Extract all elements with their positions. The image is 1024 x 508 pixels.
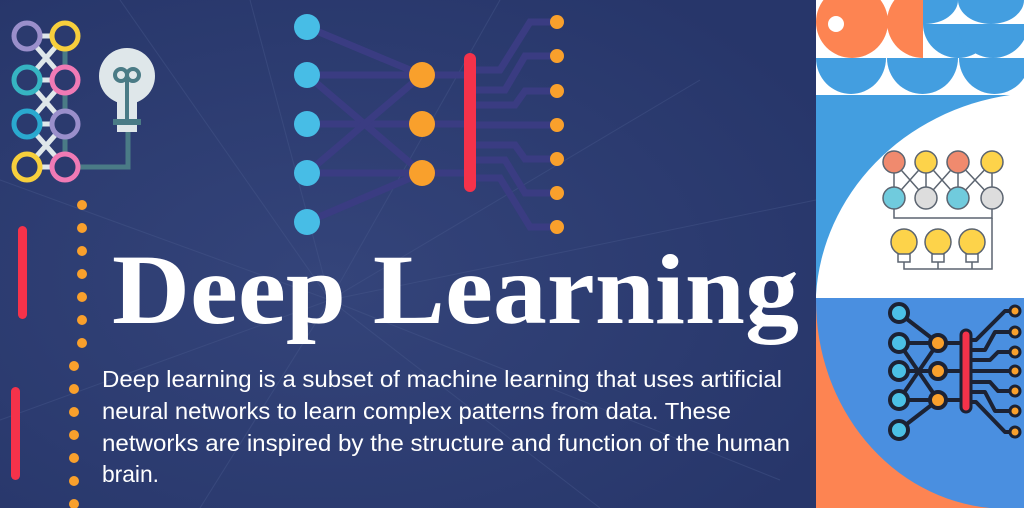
description text: networks are inspired by the structure and function of the human xyxy=(102,430,790,456)
icon: central network xyxy=(294,14,564,235)
description text: brain. xyxy=(102,461,159,487)
icon: network with lightbulbs xyxy=(883,151,1003,269)
description text xyxy=(102,366,790,487)
title: Deep Learning xyxy=(112,234,799,345)
description text: neural networks to learn complex patterns from data. These xyxy=(102,398,731,424)
description text: Deep learning is a subset of machine learning that uses artificial xyxy=(102,366,782,392)
icon: neural network with lightbulb xyxy=(14,23,155,180)
middle blue section with white arc xyxy=(816,95,1024,298)
top geometric shapes xyxy=(816,0,1024,94)
panel: right geometric column xyxy=(816,0,1024,508)
background panel xyxy=(0,0,816,508)
icon: circuit neural network xyxy=(890,304,1020,439)
decoration: left dotted columns and red bars xyxy=(11,200,87,508)
bottom blue/orange section xyxy=(816,298,1024,508)
